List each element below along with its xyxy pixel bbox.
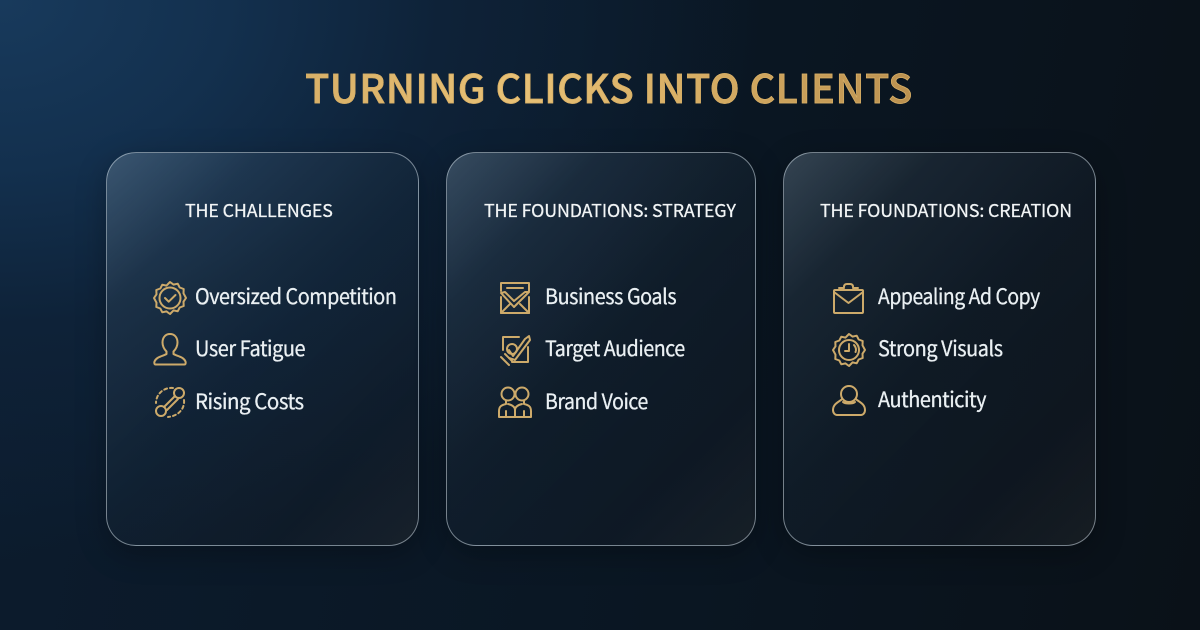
label: authenticity: Authenticity	[878, 384, 986, 414]
icon: envelope briefcase	[833, 283, 864, 314]
label: brand voice: Brand Voice	[545, 386, 648, 416]
label: oversized competition: Oversized Competition	[195, 281, 396, 311]
heading: the foundations strategy: THE FOUNDATIONS: STRATEGY	[484, 197, 736, 223]
heading: the foundations creation: THE FOUNDATIONS: CREATION	[820, 197, 1072, 223]
label: user fatigue: User Fatigue	[195, 333, 305, 363]
title: TURNING CLICKS INTO CLIENTS	[305, 58, 913, 115]
icon: two people	[498, 386, 532, 418]
icon: envelope with check	[500, 282, 530, 314]
label: target audience: Target Audience	[545, 333, 685, 363]
icon: gear timer	[832, 333, 866, 367]
label: appealing ad copy: Appealing Ad Copy	[878, 281, 1040, 311]
icon: rising costs link	[155, 386, 186, 418]
panel: the challenges	[106, 152, 419, 546]
panel: the foundations creation	[783, 152, 1096, 546]
icon: gear badge with check	[153, 281, 187, 315]
label: business goals: Business Goals	[545, 281, 676, 311]
icon: user	[153, 333, 187, 366]
icon: target with pencil	[500, 335, 531, 366]
label: strong visuals: Strong Visuals	[878, 333, 1003, 363]
label: rising costs: Rising Costs	[195, 386, 304, 416]
heading: the challenges: THE CHALLENGES	[185, 197, 333, 223]
icon: person	[832, 385, 866, 416]
panel: the foundations strategy	[446, 152, 756, 546]
